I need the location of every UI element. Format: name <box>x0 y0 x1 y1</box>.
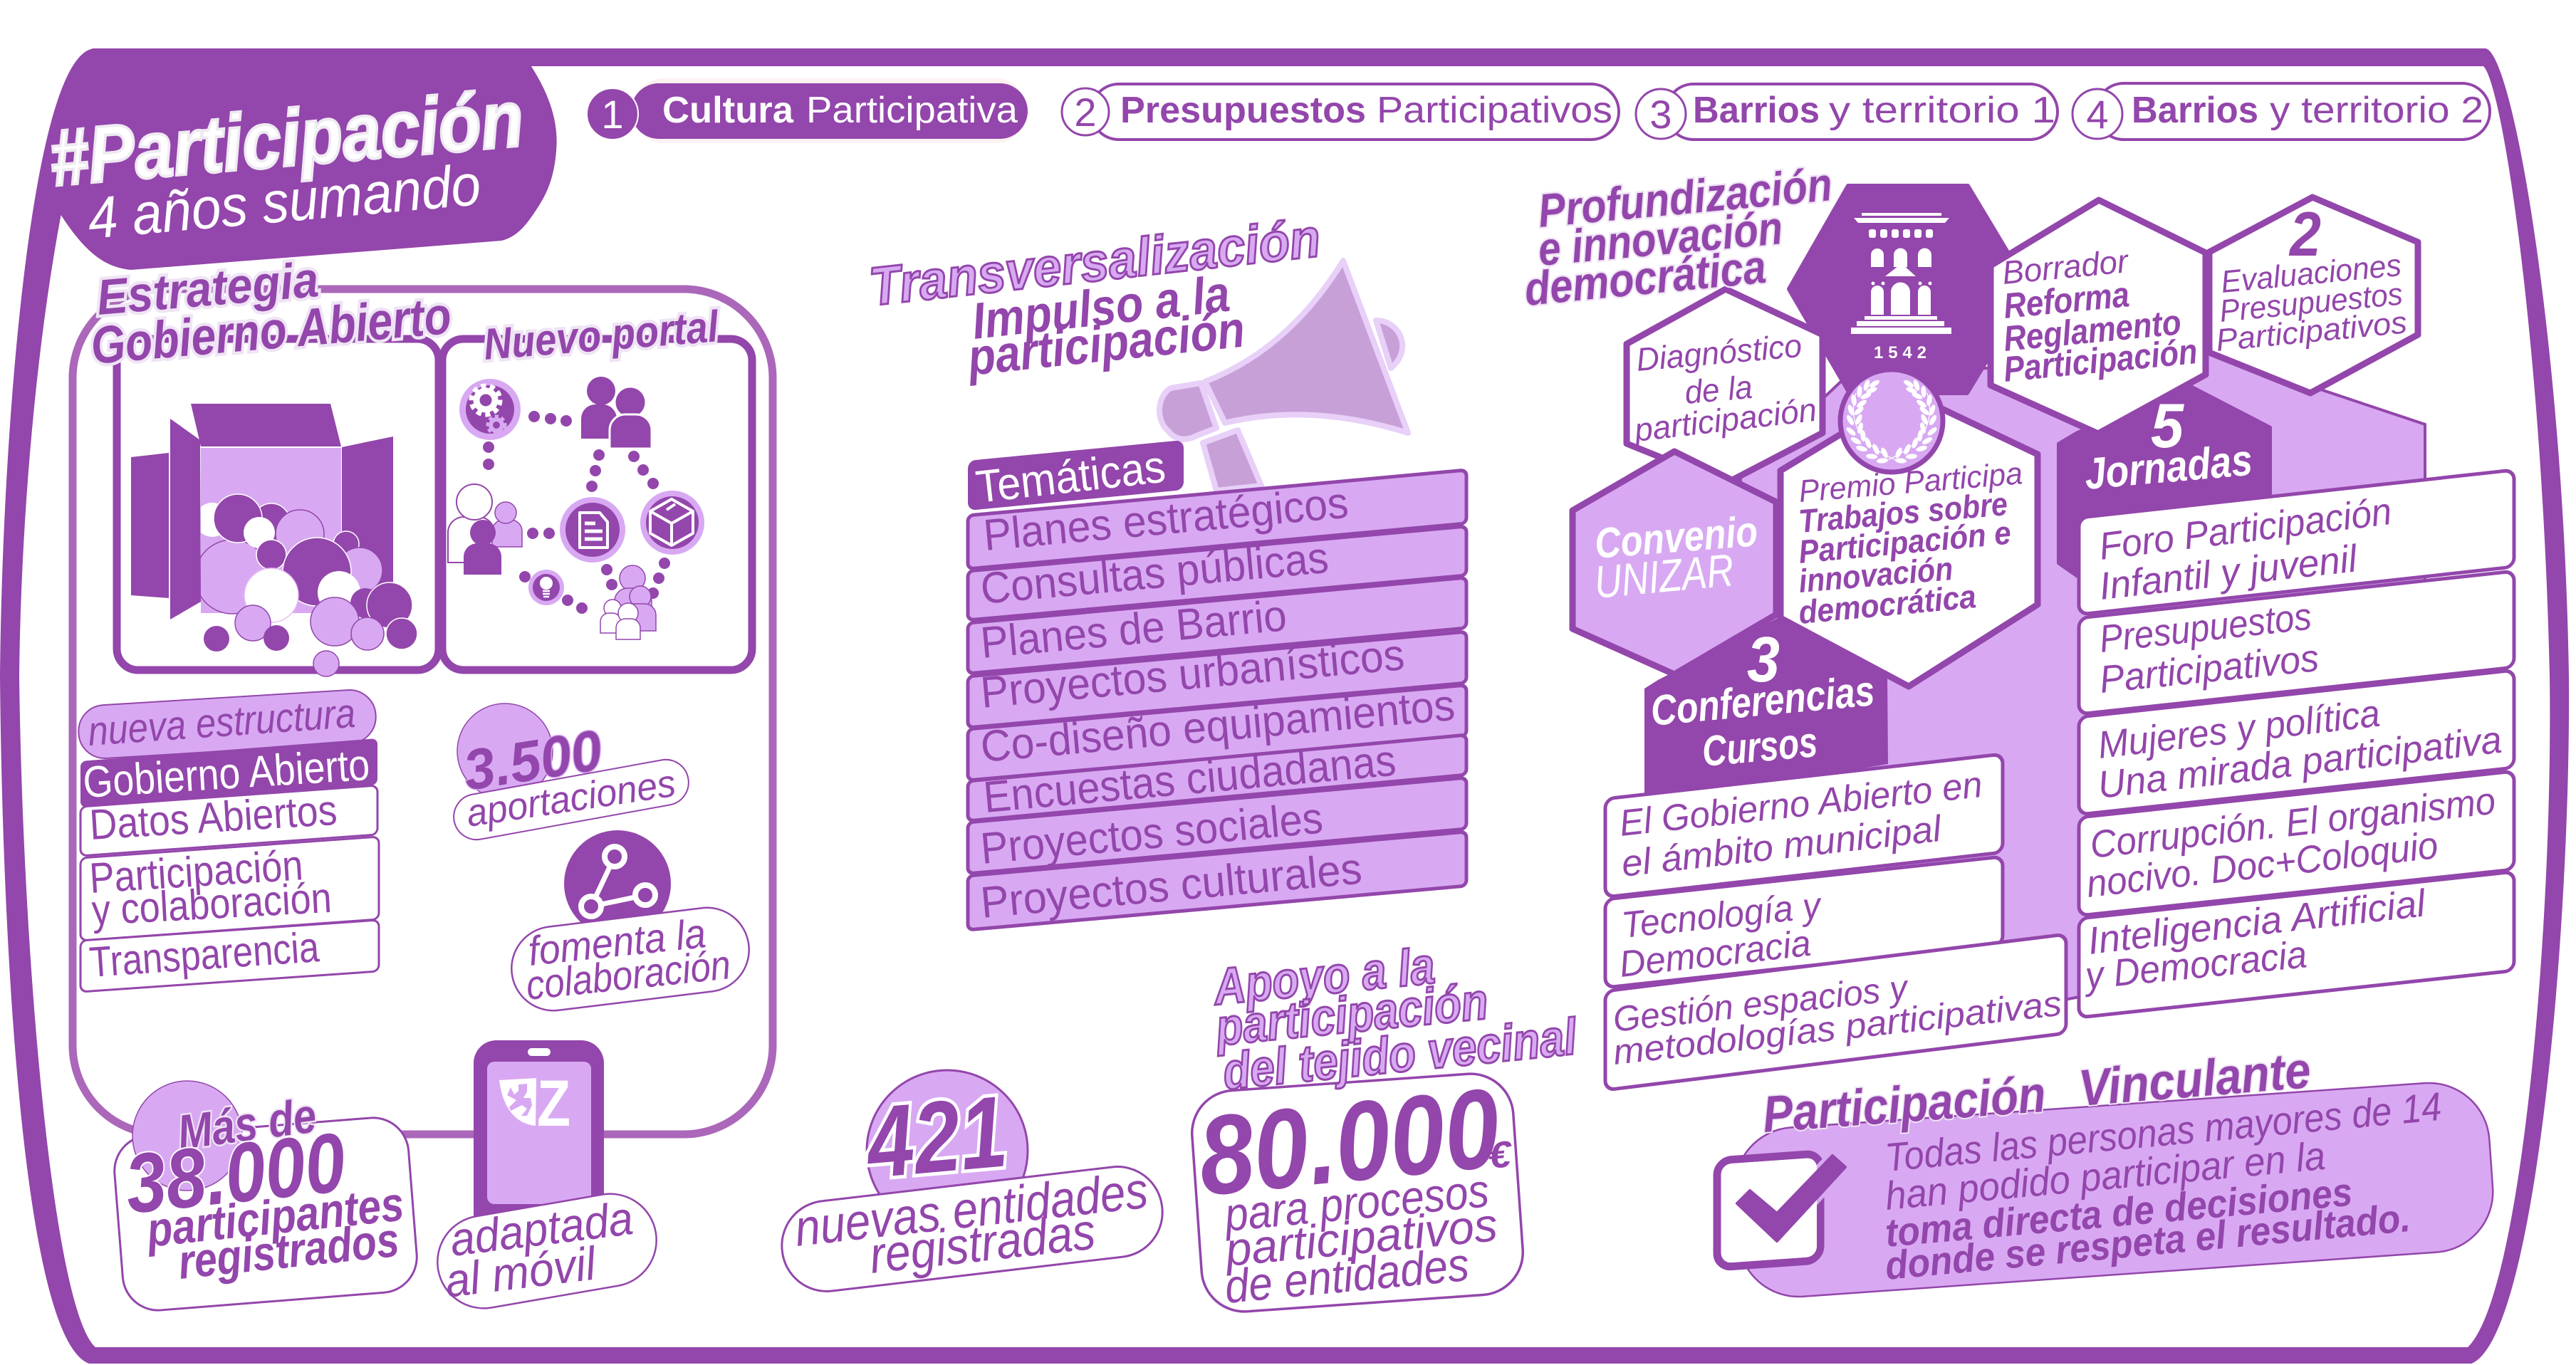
pill: nueva estructura: nueva estructura <box>86 690 357 755</box>
body text <box>1883 1084 2444 1288</box>
item: planes de barrio: Planes de Barrio <box>979 591 1288 668</box>
heading: estrategia gobierno abierto: Estrategia <box>95 251 320 325</box>
box: gobierno abierto illustration <box>117 339 439 676</box>
tab 2: Presupuestos <box>1120 90 1366 131</box>
tab 3 <box>1636 84 2058 140</box>
list: jornadas <box>2079 470 2514 1018</box>
stat: 38.000 participantes: Más de <box>174 1088 319 1160</box>
stat: fomenta la colaboracion: fomenta la <box>526 910 708 975</box>
hexagon: evaluaciones: 2 <box>2288 199 2321 269</box>
body text: han podido participar en la <box>1883 1133 2327 1218</box>
stat: 421 nuevas entidades <box>777 1070 1167 1296</box>
hexagon: diagnostico: Diagnóstico <box>1634 327 1803 378</box>
list: conferencias <box>1605 754 2066 1090</box>
tab 4 <box>2072 83 2490 140</box>
card: gestion espacios: Gestión espacios y <box>1611 967 1912 1040</box>
stat: 38.000 participantes: 38.000 <box>121 1115 350 1232</box>
tab 4: Barrios <box>2132 90 2258 131</box>
heading: profundizacion <box>1522 157 1835 315</box>
icon: checkbox <box>1717 1154 1845 1267</box>
heading: apoyo al tejido vecinal: del tejido vecinal <box>1221 1008 1580 1101</box>
tab 4: 4 <box>2086 92 2109 137</box>
title block <box>46 48 557 270</box>
body text: Todas las personas mayores de 14 <box>1883 1084 2444 1180</box>
item: proyectos culturales: Proyectos culturales <box>979 844 1364 928</box>
card: tecnologia y democracia: Democracia <box>1617 923 1813 985</box>
item: transparencia: Transparencia <box>88 923 321 986</box>
navigation tabs <box>587 78 2490 143</box>
icon: ballot box <box>640 491 704 555</box>
hexagon: premio participa <box>1780 393 2038 686</box>
hexagon: convenio unizar: Convenio <box>1593 507 1759 568</box>
hexagon: diagnostico: participación <box>1631 391 1818 449</box>
tab 2: 2 <box>1074 90 1097 135</box>
stat: 421 nuevas entidades: nuevas entidades <box>792 1162 1151 1257</box>
subtitle: 4 años sumando <box>85 152 483 251</box>
hexagon: city logo <box>1789 186 2030 393</box>
tab 2 <box>1062 84 1619 140</box>
item: planes estrategicos <box>968 470 1466 569</box>
card: presupuestos participativos: Participativos <box>2097 637 2321 701</box>
dotted connectors <box>483 411 670 614</box>
heading: estrategia gobierno abierto: Gobierno Abierto <box>88 286 454 375</box>
tab 1 active: Participativa <box>806 90 1018 131</box>
icon: document <box>560 497 625 563</box>
hexagon: diagnostico <box>1627 289 1823 483</box>
heading: profundizacion: e innovación <box>1536 201 1785 276</box>
stat: 38.000 participantes: registrados <box>176 1213 402 1290</box>
block: 5 jornadas <box>2058 385 2270 577</box>
tab 3: Barrios <box>1693 90 1820 131</box>
icon: two people <box>581 377 652 449</box>
card: inteligencia artificial <box>2079 872 2514 1018</box>
item: participacion y colaboracion: Participación <box>88 841 304 902</box>
item: proyectos sociales <box>968 778 1466 874</box>
hexagon: convenio unizar: UNIZAR <box>1592 544 1736 608</box>
stat: 38.000 participantes: participantes <box>143 1176 407 1257</box>
icon: phone: Z <box>537 1067 570 1140</box>
icon: crowd <box>600 565 656 639</box>
stat: 3.500 aportaciones <box>450 704 692 843</box>
hexagon: borrador reforma: Reforma <box>2002 274 2131 326</box>
item: encuestas ciudadanas: Encuestas ciudadanas <box>981 736 1398 822</box>
heading: apoyo al tejido vecinal: participación <box>1212 973 1491 1057</box>
tab 1 active <box>587 78 1028 143</box>
block: 3 conferencias cursos: Cursos <box>1700 718 1820 775</box>
icon: group of three <box>448 484 522 575</box>
hexagon: borrador reforma <box>1991 200 2206 434</box>
body text: toma directa de decisiones <box>1883 1169 2354 1255</box>
stat: fomenta la colaboracion <box>507 830 753 1015</box>
heading: Vinculante <box>2077 1042 2312 1117</box>
stat: 80.000 euros: de entidades <box>1222 1238 1471 1313</box>
block: 5 jornadas: 5 <box>2151 390 2184 461</box>
item: planes estrategicos: Planes estratégicos <box>981 478 1350 560</box>
tab 1 active: Cultura <box>662 90 794 131</box>
stat: 3.500 aportaciones: 3.500 <box>459 718 606 802</box>
card: mujeres y politica <box>2079 670 2514 815</box>
stat: 80.000 euros: para procesos <box>1221 1163 1491 1241</box>
card: mujeres y politica: Una mirada participativa <box>2096 718 2504 807</box>
stat: 80.000 euros: € <box>1486 1134 1514 1177</box>
panel: estrategia gobierno abierto <box>73 289 773 1134</box>
hexagon: premio participa: democrática <box>1797 577 1978 631</box>
stat: 421 nuevas entidades: 421 <box>860 1074 1011 1200</box>
icon: megaphone <box>1159 261 1408 491</box>
hexagon: borrador reforma: Reglamento <box>2002 302 2183 359</box>
item: planes de barrio <box>968 577 1466 674</box>
logo year: 1542 <box>1874 343 1926 362</box>
hexagon: evaluaciones: Presupuestos <box>2218 276 2404 329</box>
heading: transversalizacion: participación <box>964 301 1248 387</box>
card: foro participacion <box>2079 470 2514 614</box>
heading: transversalizacion <box>867 208 1323 387</box>
block: 3 conferencias cursos <box>1644 618 1888 805</box>
item: consultas publicas <box>968 526 1466 620</box>
tab 4: y territorio 2 <box>2270 90 2483 131</box>
heading <box>1761 1042 2312 1144</box>
card: corrupcion <box>2079 771 2514 916</box>
tab 3: y territorio 1 <box>1829 90 2055 131</box>
card: gestion espacios <box>1605 934 2066 1090</box>
heading: estrategia gobierno abierto <box>88 251 454 375</box>
heading: nuevo portal: Nuevo portal <box>482 302 721 370</box>
icon: gears <box>459 379 521 440</box>
card: corrupcion: Corrupción. El organismo <box>2088 780 2498 867</box>
hexagon: borrador reforma: Participación <box>2002 331 2199 389</box>
panel: participacion vinculante <box>1717 1042 2497 1301</box>
list: nueva estructura <box>77 689 379 992</box>
stat: mobile: al móvil <box>442 1236 600 1307</box>
item: consultas publicas: Consultas públicas <box>979 533 1330 614</box>
body text: donde se respeta el resultado. <box>1883 1195 2412 1288</box>
item: datos abiertos: Datos Abiertos <box>88 786 338 849</box>
item: participacion y colaboracion <box>80 837 379 941</box>
card: inteligencia artificial: Inteligencia Artificial <box>2086 882 2429 963</box>
tab 3: 3 <box>1649 92 1672 137</box>
item: co-diseno equipamientos: Co-diseño equipamientos <box>979 681 1457 772</box>
item: proyectos culturales <box>968 832 1466 930</box>
tab 1 active: 1 <box>601 92 624 137</box>
hexagon: evaluaciones <box>2209 197 2418 393</box>
icon: laurel badge <box>1840 370 1943 472</box>
icon: aljaferia logo <box>1851 213 1951 334</box>
card: foro participacion: Infantil y juvenil <box>2097 537 2360 608</box>
card: mujeres y politica: Mujeres y política <box>2095 692 2382 767</box>
card: foro participacion: Foro Participación <box>2097 490 2394 568</box>
hexagon: premio participa: Participación e <box>1797 514 2013 570</box>
card: presupuestos participativos: Presupuestos <box>2097 595 2314 661</box>
card: gobierno abierto municipal <box>1605 754 2003 897</box>
box: nuevo portal illustration <box>442 339 752 670</box>
stat: 80.000 euros: 80.000 <box>1193 1065 1505 1220</box>
heading: apoyo al tejido vecinal <box>1210 937 1580 1101</box>
card: tecnologia y democracia <box>1605 857 2003 988</box>
heading: profundizacion: democrática <box>1522 240 1768 315</box>
icon: network share <box>564 830 671 937</box>
hexagon: evaluaciones: Evaluaciones <box>2219 248 2403 300</box>
stat: 38.000 participantes <box>112 1081 419 1313</box>
tab 2: Participativos <box>1377 90 1612 131</box>
stat: 421 nuevas entidades: registradas <box>867 1203 1098 1285</box>
title: #Participación <box>46 73 527 203</box>
heading: transversalizacion: Transversalización <box>867 208 1323 318</box>
block: 5 jornadas: Jornadas <box>2082 436 2254 499</box>
icon: phone <box>474 1040 604 1240</box>
icon: light bulb <box>528 570 564 605</box>
card: presupuestos participativos <box>2079 571 2514 714</box>
hexagon: convenio unizar <box>1573 451 1776 674</box>
card: gobierno abierto municipal: El Gobierno Abierto en <box>1617 764 1984 844</box>
heading: profundizacion: Profundización <box>1535 157 1835 237</box>
hexagon: premio participa: innovación <box>1797 550 1954 600</box>
block: 3 conferencias cursos: Conferencias <box>1649 666 1877 735</box>
card: gobierno abierto municipal: el ámbito municipal <box>1620 808 1944 885</box>
block: 3 conferencias cursos: 3 <box>1747 624 1780 696</box>
card: tecnologia y democracia: Tecnología y <box>1620 885 1825 946</box>
stat: mobile: adaptada <box>447 1191 636 1266</box>
stat: 80.000 euros <box>1189 1065 1526 1314</box>
stat: 80.000 euros: participativos <box>1221 1198 1500 1276</box>
heading: Participación <box>1761 1066 2048 1144</box>
card: inteligencia artificial: y Democracia <box>2080 933 2309 998</box>
card: corrupcion: nocivo. Doc+Coloquio <box>2085 824 2440 906</box>
hexagon: diagnostico: de la <box>1683 368 1754 411</box>
item: proyectos sociales: Proyectos sociales <box>979 794 1325 874</box>
item: participacion y colaboracion: y colaboración <box>90 874 333 934</box>
background: light polygon <box>1741 352 2425 1032</box>
hexagon: premio participa: Premio Participa <box>1798 456 2024 509</box>
hexagon: evaluaciones: Participativos <box>2214 305 2409 358</box>
stat: fomenta la colaboracion: colaboración <box>524 941 733 1009</box>
heading: transversalizacion: Impulso a la <box>969 266 1233 350</box>
heading: apoyo al tejido vecinal: Apoyo a la <box>1210 937 1437 1016</box>
item: gobierno abierto: Gobierno Abierto <box>82 741 371 807</box>
hexagon: premio participa: Trabajos sobre <box>1797 485 2009 540</box>
tab: tematicas: Temáticas <box>974 441 1168 513</box>
stat: 3.500 aportaciones: aportaciones <box>464 762 679 835</box>
stat: mobile <box>430 1040 664 1315</box>
list: tematicas <box>968 440 1466 930</box>
hexagon: borrador reforma: Borrador <box>2001 242 2131 291</box>
item: proyectos urbanisticos: Proyectos urbanísticos <box>979 630 1407 718</box>
card: gestion espacios: metodologías participativas <box>1611 983 2063 1072</box>
